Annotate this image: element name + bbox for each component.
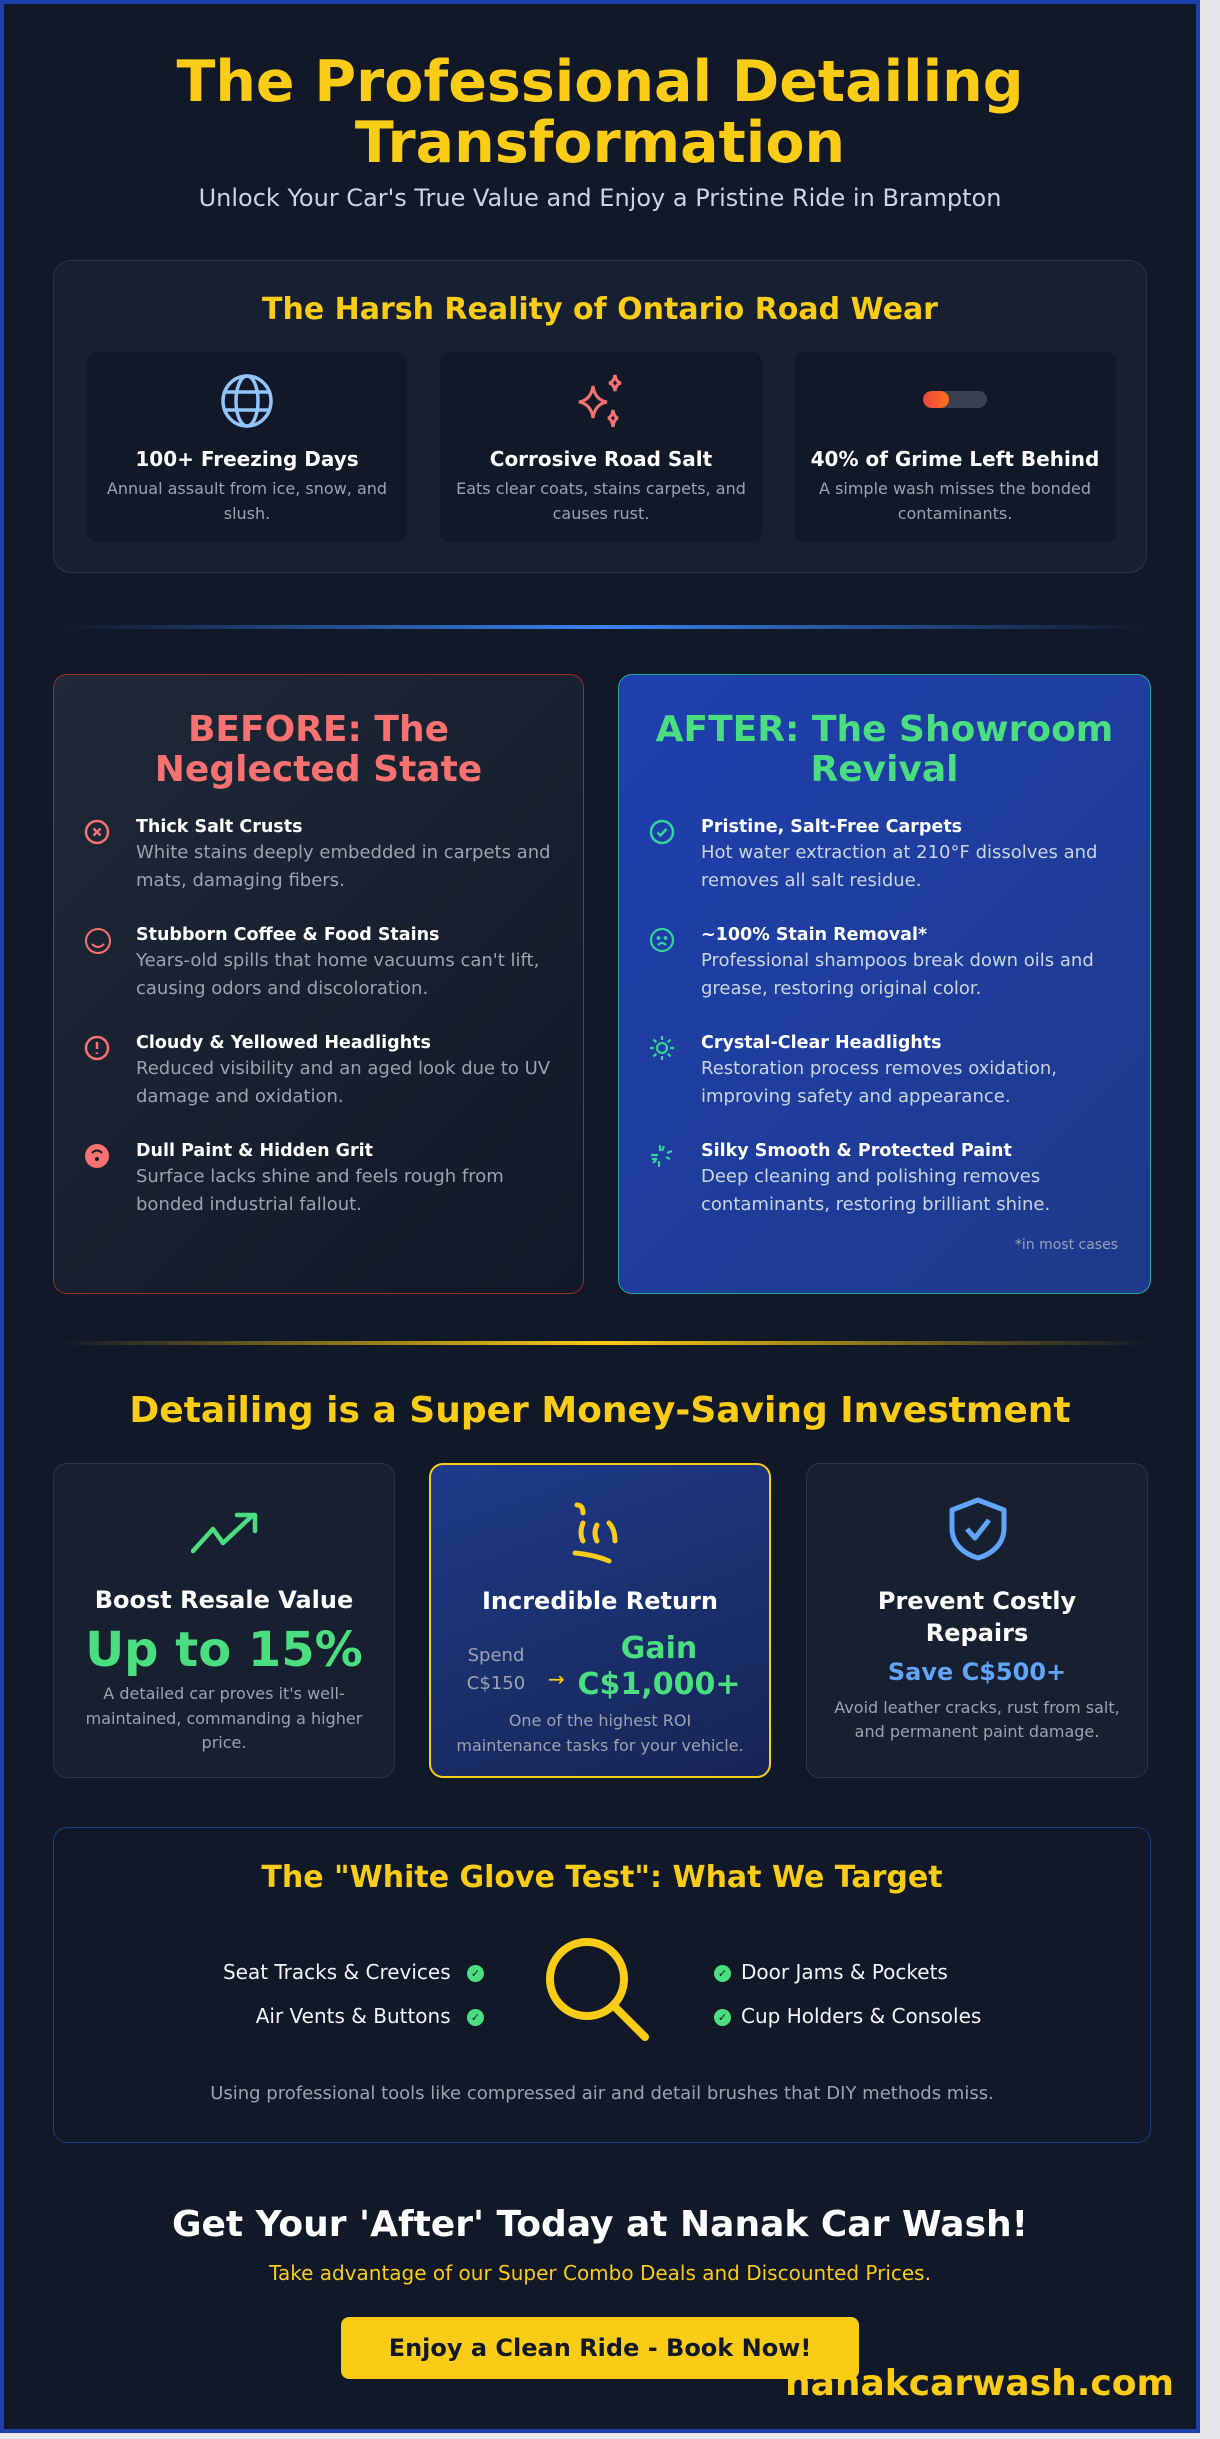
- footnote: *in most cases: [1015, 1237, 1118, 1253]
- card: repairs: Repairs: [926, 1619, 1028, 1647]
- cta heading: Get Your 'After' Today at Nanak Car Wash!: [172, 2204, 1028, 2245]
- panel: before: [53, 674, 584, 1294]
- roi figure: Gain: [621, 1631, 697, 1666]
- list left: [223, 1960, 484, 2028]
- before heading: Neglected State: [155, 749, 482, 790]
- list left: Seat Tracks & Crevices: [223, 1960, 451, 1984]
- button: [341, 2317, 859, 2379]
- item: coffee stains: Years-old spills that home vacuums can't lift, causing odors and discoloration.: [136, 950, 539, 999]
- list left: Air Vents & Buttons: [256, 2004, 451, 2028]
- item: smooth paint: Silky Smooth & Protected Paint: [701, 1141, 1012, 1161]
- card: resale: A detailed car proves it's well-maintained, commanding a higher price.: [86, 1684, 362, 1752]
- icon: magnifier: [546, 1938, 649, 2041]
- title: Transformation: [355, 110, 845, 176]
- item: salt crusts: White stains deeply embedded in carpets and mats, damaging fibers.: [136, 842, 551, 891]
- item: headlights: Reduced visibility and an aged look due to UV damage and oxidation.: [136, 1058, 550, 1107]
- icon: trend up: [191, 1512, 258, 1554]
- item: carpets: Pristine, Salt-Free Carpets: [701, 817, 962, 837]
- item: coffee stains: Stubborn Coffee & Food Stains: [136, 925, 439, 945]
- panel heading: The Harsh Reality of Ontario Road Wear: [262, 292, 938, 327]
- icon: x circle: [84, 820, 110, 844]
- panel: white glove test: [53, 1827, 1151, 2143]
- icon: money hand: [572, 1502, 618, 1564]
- item: dull paint: Surface lacks shine and feels rough from bonded industrial fallout.: [136, 1166, 504, 1215]
- item: crystal headlights: Restoration process removes oxidation, improving safety and appearance.: [701, 1058, 1057, 1107]
- list right: Cup Holders & Consoles: [741, 2004, 981, 2028]
- item: dull paint: Dull Paint & Hidden Grit: [136, 1141, 373, 1161]
- item: coffee stains: [85, 925, 539, 999]
- item: salt crusts: [84, 817, 551, 891]
- card: resale: [53, 1463, 395, 1778]
- icon: sparkles: [578, 374, 622, 428]
- icon: shield: [950, 1498, 1006, 1560]
- icon: filled circle: [85, 1144, 109, 1168]
- item: salt crusts: Thick Salt Crusts: [136, 817, 302, 837]
- card: resale: Boost Resale Value: [95, 1586, 353, 1614]
- icon: globe: [221, 374, 273, 428]
- card: grime: A simple wash misses the bonded contaminants.: [819, 479, 1091, 523]
- card: freezing days: [87, 352, 407, 542]
- card: return: [429, 1463, 771, 1778]
- item: carpets: [650, 817, 1097, 891]
- roi figure: [467, 1631, 740, 1702]
- after heading: Revival: [810, 749, 959, 790]
- note: Using professional tools like compressed air and detail brushes that DIY methods miss.: [210, 2083, 994, 2104]
- item: smooth paint: [651, 1141, 1050, 1215]
- item: smooth paint: Deep cleaning and polishing removes contaminants, restoring brilliant shine.: [701, 1166, 1050, 1215]
- card: repairs: Save C$500+: [888, 1658, 1066, 1686]
- icon: sparkle burst: [651, 1145, 672, 1167]
- list right: ✓: [718, 1967, 727, 1980]
- after heading: AFTER: The Showroom: [656, 709, 1113, 750]
- card: return: Incredible Return: [482, 1587, 718, 1615]
- list left: ✓: [471, 1967, 480, 1980]
- card: road salt: Corrosive Road Salt: [490, 447, 712, 471]
- list right: Door Jams & Pockets: [741, 1960, 948, 1984]
- title: The Professional Detailing: [176, 49, 1024, 115]
- card: freezing days: 100+ Freezing Days: [135, 447, 359, 471]
- list left: ✓: [471, 2011, 480, 2024]
- card: grime: 40% of Grime Left Behind: [811, 447, 1099, 471]
- roi figure: Spend C$150: [467, 1645, 525, 1694]
- stat: Up to 15%: [85, 1622, 363, 1678]
- card: freezing days: Annual assault from ice, snow, and slush.: [107, 479, 387, 523]
- card: return: One of the highest ROI: [509, 1711, 691, 1730]
- panel: after: [618, 674, 1151, 1294]
- cta subtitle: Take advantage of our Super Combo Deals and Discounted Prices.: [269, 2261, 931, 2285]
- item: crystal headlights: Crystal-Clear Headlights: [701, 1033, 942, 1053]
- button: Enjoy a Clean Ride - Book Now!: [389, 2334, 811, 2362]
- card: road salt: Eats clear coats, stains carpets, and causes rust.: [456, 479, 746, 523]
- item: stain removal: [650, 925, 1094, 999]
- card: repairs: [806, 1463, 1148, 1778]
- after heading: [656, 709, 1113, 790]
- card: repairs: Avoid leather cracks, rust from salt, and permanent paint damage.: [834, 1698, 1120, 1741]
- heading: investment: Detailing is a Super Money-Saving Investment: [129, 1390, 1071, 1431]
- icon: alert: [84, 1036, 110, 1060]
- card: repairs: Prevent Costly: [878, 1587, 1076, 1615]
- roi figure: →: [548, 1667, 565, 1691]
- icon: progress pill: [923, 391, 987, 408]
- item: headlights: [84, 1033, 550, 1107]
- icon: check circle: [650, 820, 674, 844]
- item: dull paint: [85, 1141, 504, 1215]
- item: crystal headlights: [650, 1033, 1057, 1107]
- title: [176, 49, 1024, 176]
- list right: ✓: [718, 2011, 727, 2024]
- subtitle: Unlock Your Car's True Value and Enjoy a Pristine Ride in Brampton: [199, 184, 1001, 212]
- card: road salt: [440, 352, 762, 542]
- website: nanakcarwash.com: [785, 2363, 1174, 2404]
- icon: sun: [650, 1036, 674, 1060]
- item: stain removal: ~100% Stain Removal*: [701, 925, 927, 945]
- item: headlights: Cloudy & Yellowed Headlights: [136, 1033, 431, 1053]
- before heading: [155, 709, 482, 790]
- list right: [714, 1960, 981, 2028]
- icon: face: [650, 928, 674, 952]
- item: stain removal: Professional shampoos break down oils and grease, restoring original color.: [701, 950, 1094, 999]
- card: return: maintenance tasks for your vehicle.: [456, 1736, 744, 1754]
- roi figure: C$1,000+: [578, 1667, 740, 1702]
- item: carpets: Hot water extraction at 210°F dissolves and removes all salt residue.: [701, 842, 1097, 891]
- card: grime: [794, 352, 1116, 542]
- panel: road wear: [53, 260, 1147, 573]
- before heading: BEFORE: The: [188, 709, 449, 750]
- icon: circle: [85, 928, 111, 954]
- panel heading: The "White Glove Test": What We Target: [261, 1860, 943, 1895]
